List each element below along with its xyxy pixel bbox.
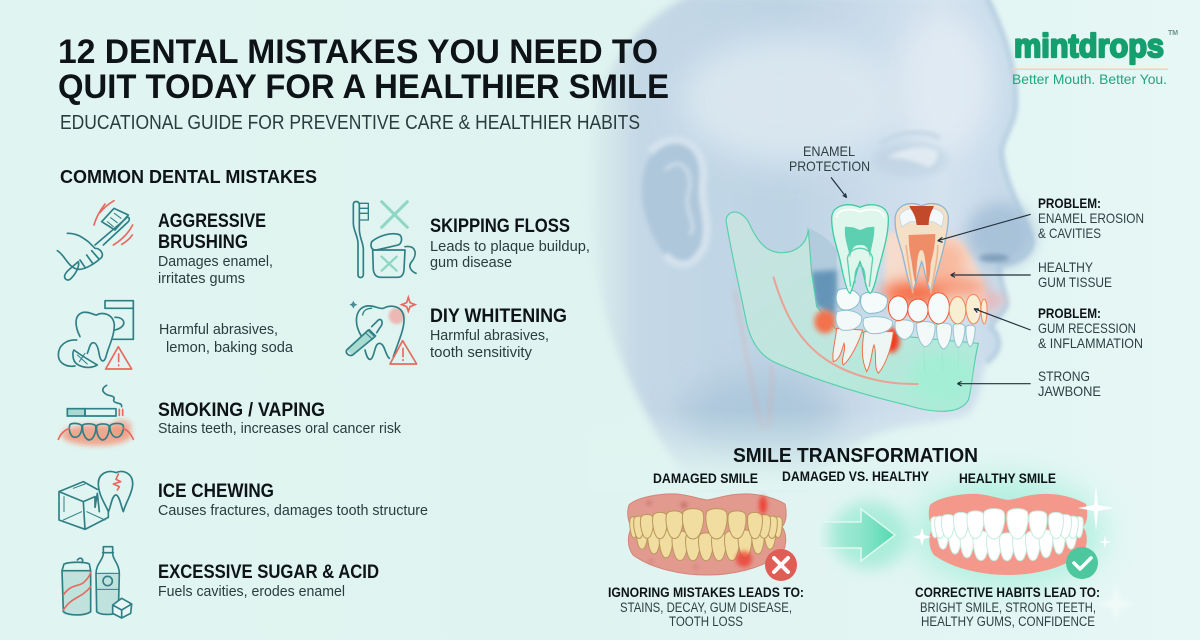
- label: gum recession and inflammation: & INFLAMMATION: [1038, 335, 1143, 351]
- lower front roots: [923, 347, 958, 373]
- item: ice chewing: [59, 472, 428, 529]
- illustration: healthy smile: [913, 478, 1114, 588]
- item: excessive sugar and acid: [62, 547, 379, 618]
- title: QUIT TODAY FOR A HEALTHIER SMILE: [58, 68, 669, 106]
- description: Fuels cavities, erodes enamel: [158, 584, 345, 600]
- label: healthy gum tissue: [1038, 259, 1112, 290]
- icon: healthy tooth: [832, 205, 888, 293]
- text: ignoring mistakes: TOOTH LOSS: [669, 614, 743, 629]
- text: ignoring mistakes: [608, 585, 804, 629]
- item: smoking / vaping: [58, 385, 402, 446]
- heading: EXCESSIVE SUGAR & ACID: [158, 561, 379, 583]
- illustration: jaw and teeth: [726, 177, 1031, 411]
- icon: can, bottle and sugar cube: [62, 547, 132, 618]
- icon: tooth, brush and warning: [346, 297, 417, 364]
- heading: SMOKING / VAPING: [158, 399, 325, 421]
- label: enamel erosion and cavities: PROBLEM:: [1038, 195, 1101, 211]
- icon: tooth with cavity: [895, 204, 948, 293]
- chin highlight: [910, 353, 970, 400]
- icon: cigarette over teeth: [58, 385, 133, 446]
- item: harmful abrasives: [58, 301, 294, 369]
- jaw hollow: [812, 270, 837, 317]
- neck shadow: [680, 375, 840, 465]
- heading: AGGRESSIVE: [158, 210, 266, 232]
- icon: hand brushing: [57, 201, 133, 280]
- label: healthy gum tissue: GUM TISSUE: [1038, 274, 1112, 290]
- face light shading: [895, 15, 995, 155]
- heading: healthy smile: HEALTHY SMILE: [959, 471, 1056, 486]
- mandible: [726, 212, 978, 411]
- arrow: cavities: [938, 214, 1031, 242]
- title: [58, 33, 669, 106]
- cheek light shading: [680, 35, 900, 165]
- label: enamel erosion and cavities: & CAVITIES: [1038, 225, 1101, 241]
- logo: mintdrops: Better Mouth. Better You.: [1012, 71, 1167, 87]
- description: lemon, baking soda: [166, 340, 294, 356]
- description: Leads to plaque buildup,: [430, 239, 590, 255]
- description: Harmful abrasives,: [430, 328, 549, 344]
- eyebrow: [880, 133, 940, 144]
- item: aggressive brushing: [57, 201, 273, 287]
- label: enamel protection: [789, 143, 870, 174]
- arrow: gum recession: [974, 309, 1031, 330]
- label: gum recession and inflammation: PROBLEM:: [1038, 305, 1101, 321]
- logo: mintdrops: [1012, 27, 1178, 87]
- label: enamel protection: ENAMEL: [803, 143, 855, 159]
- description: tooth sensitivity: [430, 345, 533, 361]
- icon: green check badge: [1066, 547, 1098, 579]
- label: gum recession and inflammation: GUM RECESSION: [1038, 320, 1136, 336]
- text: corrective habits: BRIGHT SMILE, STRONG TEETH,: [920, 600, 1096, 615]
- description: Stains teeth, increases oral cancer risk: [158, 421, 402, 437]
- heading: damaged smile: DAMAGED SMILE: [653, 471, 758, 486]
- label: gum recession and inflammation: [1038, 305, 1143, 351]
- gum inflammation: [882, 240, 994, 313]
- icon: ice cube and tooth: [59, 472, 133, 529]
- heading: damaged vs healthy: DAMAGED VS. HEALTHY: [782, 469, 929, 484]
- text: corrective habits: [915, 585, 1100, 629]
- eye socket and eyelid: [872, 142, 948, 178]
- label: enamel protection: PROTECTION: [789, 158, 870, 174]
- decorative sparkle: [1098, 584, 1134, 622]
- icon: toothbrush and floss: [353, 201, 416, 277]
- item: skipping floss: [353, 201, 590, 277]
- heading: SKIPPING FLOSS: [430, 215, 570, 237]
- lips shadow: [983, 292, 1007, 308]
- text: ignoring mistakes: IGNORING MISTAKES LEADS TO:: [608, 585, 804, 600]
- neck fade: [590, 405, 930, 490]
- text: corrective habits: HEALTHY GUMS, CONFIDENCE: [921, 614, 1095, 629]
- label: strong jawbone: JAWBONE: [1038, 383, 1101, 399]
- inflammation between molars: [814, 310, 900, 353]
- logo: mintdrops: mintdrops: [1014, 27, 1164, 64]
- lower teeth: [836, 310, 975, 349]
- inflammation spots: [647, 496, 767, 568]
- heading: ICE CHEWING: [158, 480, 274, 502]
- heading: BRUSHING: [158, 231, 248, 253]
- label: strong jawbone: STRONG: [1038, 368, 1090, 384]
- icon: tooth, lemon, packet, warning: [58, 301, 133, 369]
- description: Causes fractures, damages tooth structure: [158, 503, 428, 519]
- icon: red x badge: [765, 549, 797, 581]
- label: enamel erosion and cavities: [1038, 195, 1144, 241]
- item: diy whitening: [346, 297, 567, 364]
- heading: common dental mistakes: COMMON DENTAL MISTAKES: [60, 167, 317, 187]
- logo: mintdrops: TM: [1168, 30, 1178, 37]
- nerve: [773, 277, 918, 384]
- upper teeth: [836, 289, 887, 313]
- sparkles: [913, 485, 1114, 549]
- text: corrective habits: CORRECTIVE HABITS LEAD TO:: [915, 585, 1100, 600]
- arrow: gum tissue: [951, 273, 1031, 277]
- neck vessels: [735, 290, 772, 430]
- label: healthy gum tissue: HEALTHY: [1038, 259, 1094, 275]
- heading: smile transformation: SMILE TRANSFORMATION: [733, 445, 978, 467]
- ear: [642, 140, 707, 265]
- subtitle: EDUCATIONAL GUIDE FOR PREVENTIVE CARE & HEALTHIER HABITS: [60, 112, 640, 134]
- description: gum disease: [430, 255, 512, 271]
- gum tissue: [885, 230, 987, 310]
- panel: smile transformation: [608, 445, 1134, 629]
- description: Harmful abrasives,: [159, 322, 278, 338]
- lower molars with roots: [833, 328, 893, 373]
- label: strong jawbone: [1038, 368, 1101, 399]
- text: ignoring mistakes: STAINS, DECAY, GUM DISEASE,: [620, 600, 792, 615]
- illustration: head profile: [587, 0, 1034, 490]
- description: Damages enamel,: [158, 254, 273, 270]
- profile edge shading: [985, 0, 1031, 362]
- arrow: jawbone: [957, 381, 1031, 386]
- nose shadow: [966, 203, 1034, 267]
- arrow: enamel protection: [831, 177, 847, 198]
- label: enamel erosion and cavities: ENAMEL EROSION: [1038, 210, 1144, 226]
- heading: DIY WHITENING: [430, 305, 567, 327]
- arrow: damaged to healthy: [818, 501, 908, 569]
- nostril: [979, 254, 1009, 262]
- title: 12 DENTAL MISTAKES YOU NEED TO: [58, 33, 658, 71]
- maxilla behind: [807, 227, 837, 310]
- illustration: damaged smile: [628, 494, 797, 581]
- description: irritates gums: [158, 271, 245, 287]
